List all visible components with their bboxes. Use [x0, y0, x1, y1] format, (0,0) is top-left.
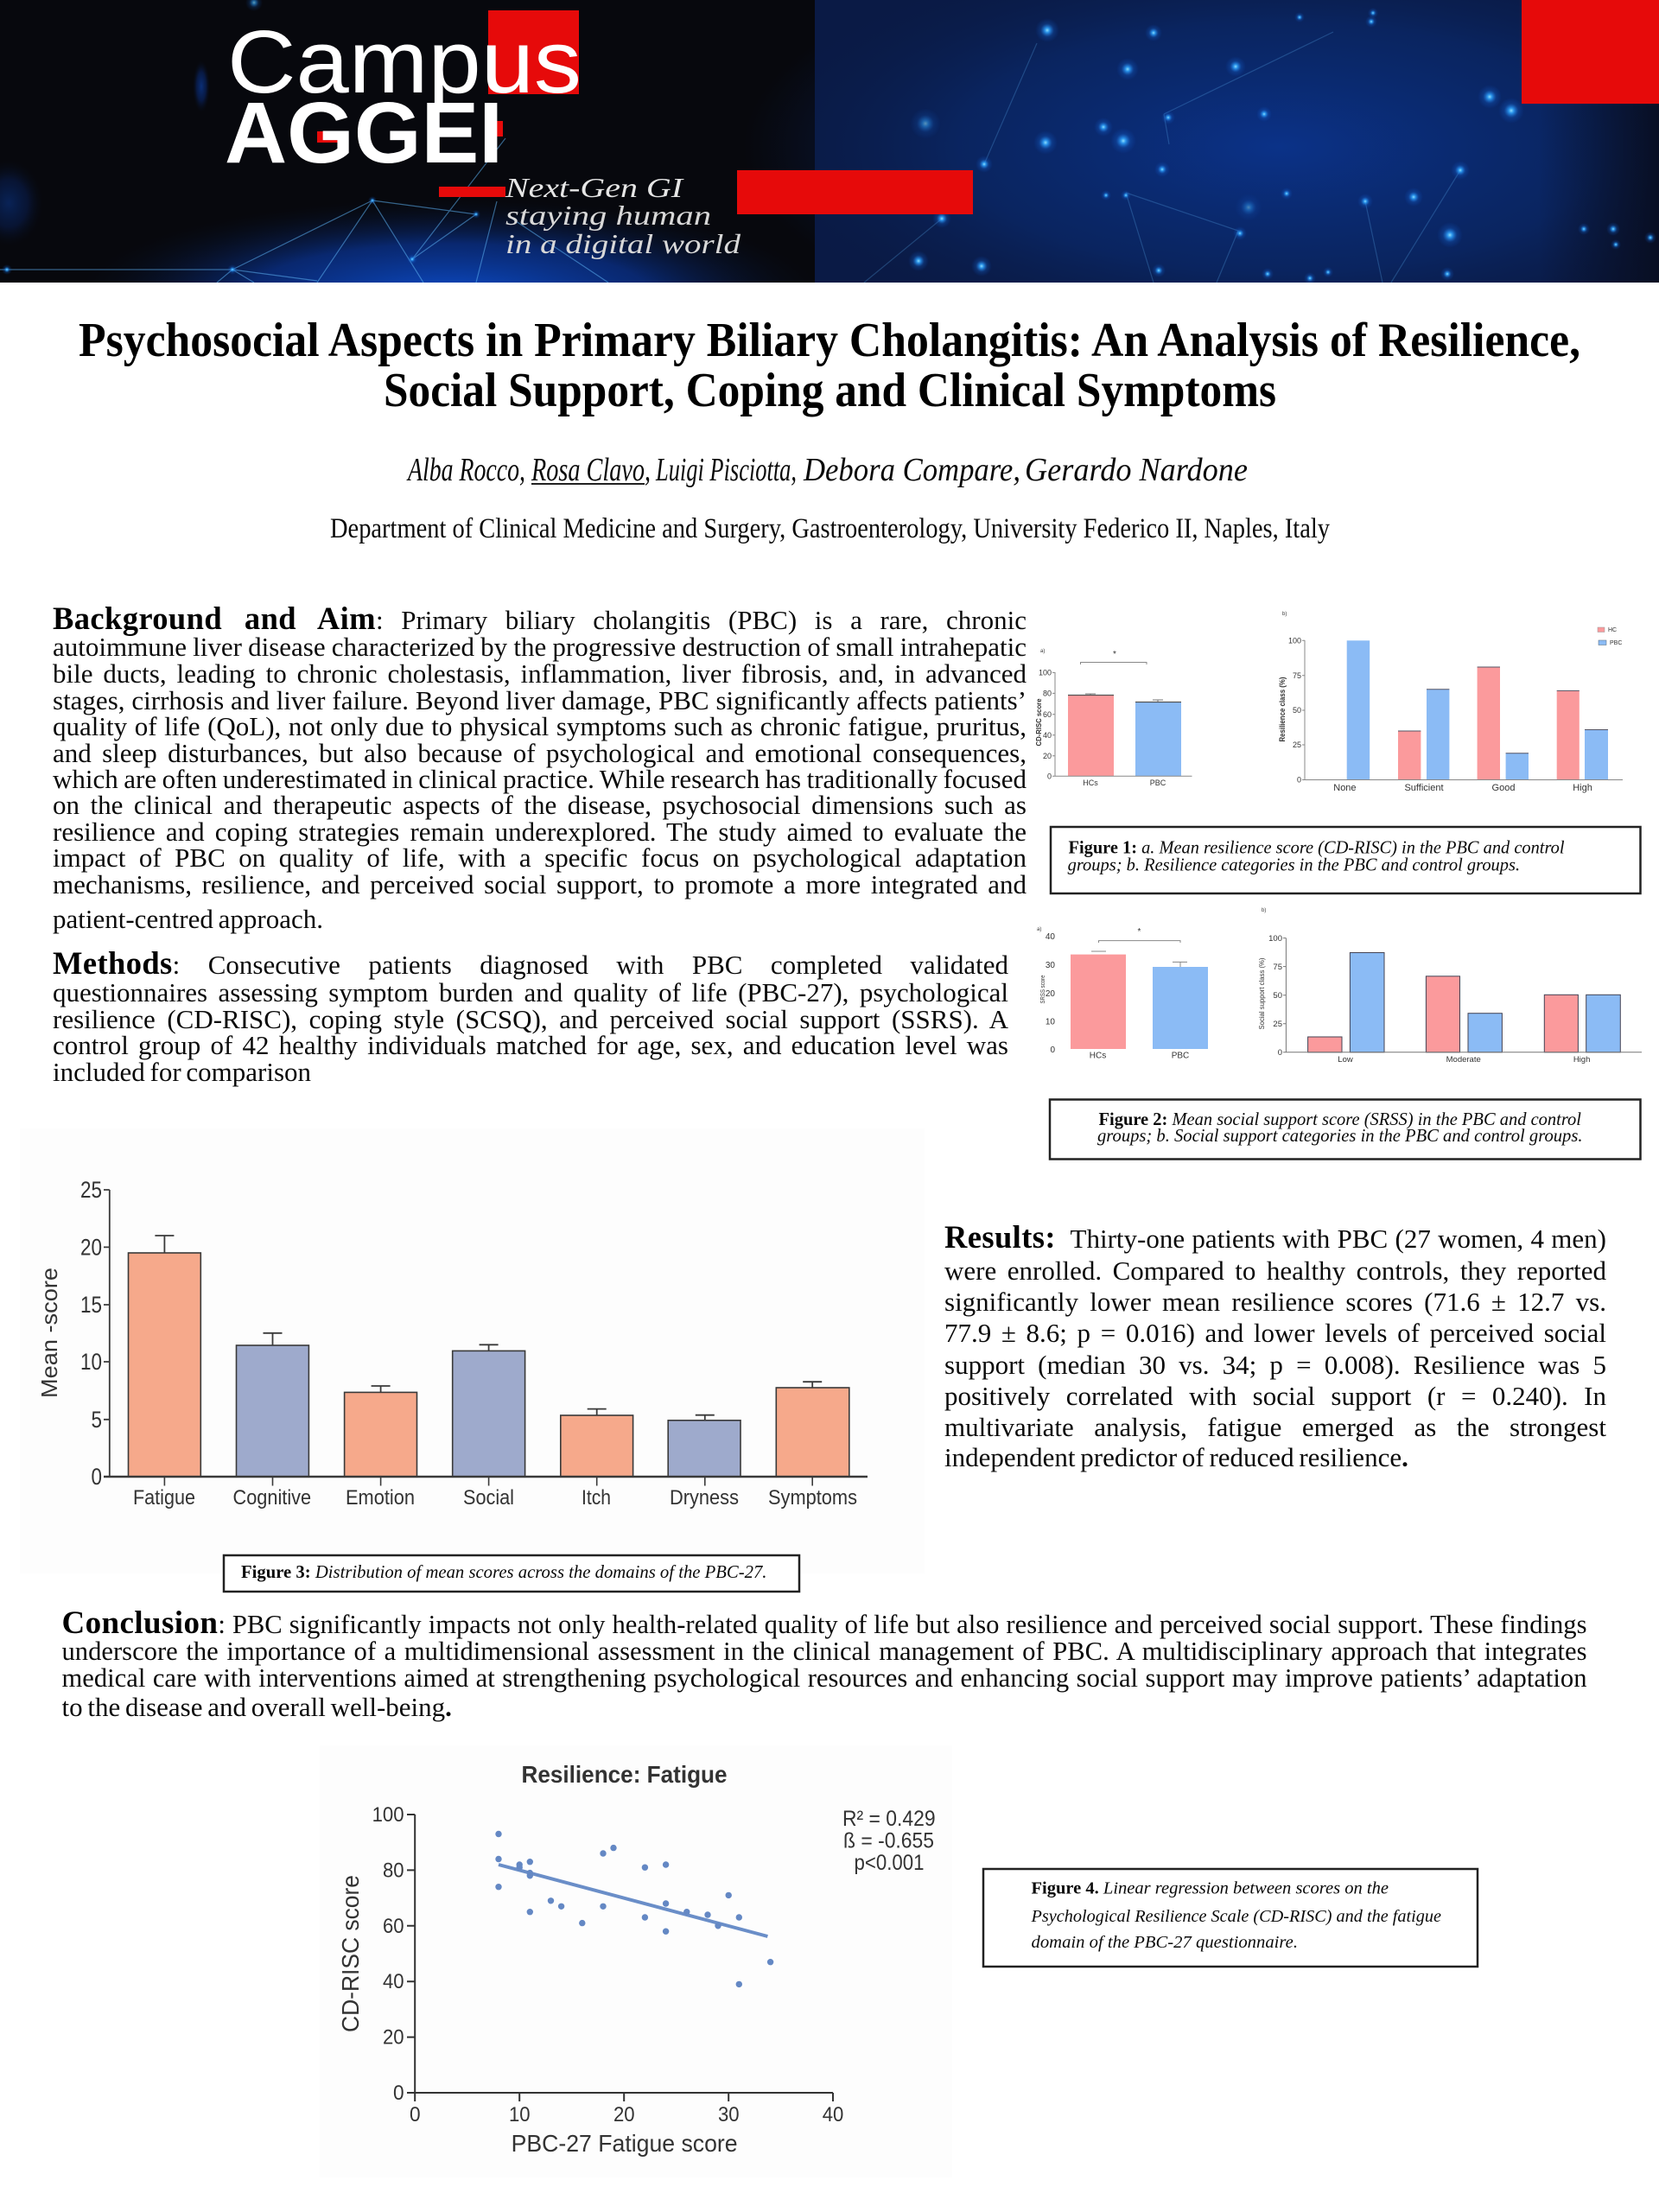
text block: background and aim: impact of PBC on quality of life, with a specific focus on psychological adaptation [53, 842, 1027, 873]
text block: background and aim: resilience and coping strategies remain underexplored. The study aimed to evaluate the [53, 817, 1027, 847]
caption: figure 1: Figure 1: a. Mean resilience score (CD-RISC) in the PBC and control [1068, 836, 1565, 857]
statistics annotation: R² = 0.429 [842, 1807, 936, 1831]
text block: results: were enrolled. Compared to healthy controls, they reported [944, 1255, 1606, 1286]
banner tagline [505, 172, 741, 259]
figure 1b: resilience categories bar chart: 25 [1293, 741, 1301, 749]
panel: figure 4 regression scatter plot: 40 [823, 2103, 843, 2126]
figure 1a: mean resilience bar chart: HCs [1083, 779, 1098, 787]
text block: background and aim: mechanisms, resilience, and perceived social support, to promote a more integrated and [53, 869, 1027, 899]
legend: HC [1608, 627, 1617, 633]
text block: background and aim: patient-centred approach. [53, 904, 323, 934]
figure 2b: social support categories bar chart: Moderate [1446, 1055, 1481, 1065]
caption: figure 4: domain of the PBC-27 questionnaire. [1032, 1933, 1298, 1952]
legend [1598, 627, 1622, 646]
authors: , [645, 452, 651, 488]
authors [406, 452, 1248, 488]
text block: conclusion: medical care with interventions aimed at strengthening psychological resources and enhancing social support may improve patients’ adaptation [62, 1663, 1586, 1693]
figure 2a: mean social support bar chart: HCs [1090, 1051, 1106, 1061]
figure 2b: social support categories bar chart: b) [1262, 908, 1266, 913]
panel: figure 4 regression scatter plot: 20 [383, 2026, 404, 2050]
panel: figure 3 PBC-27 domain bar chart: 20 [80, 1234, 102, 1260]
figure 2b: social support categories bar chart: Social support class (%) [1258, 957, 1266, 1030]
figure 1b: resilience categories bar chart: Sufficient [1404, 783, 1444, 793]
title [79, 314, 1580, 417]
title: Psychosocial Aspects in Primary Biliary Cholangitis: An Analysis of Resilience, [79, 314, 1580, 367]
caption: figure 2: Figure 2: Mean social support score (SRSS) in the PBC and control [1099, 1109, 1581, 1129]
panel: figure 3 PBC-27 domain bar chart: Cognitive [233, 1486, 311, 1510]
caption: figure 3 [224, 1555, 799, 1592]
text block: conclusion: Conclusion: PBC significantly impacts not only health-related quality of life but also resilience and perceived social support. These findings [62, 1605, 1586, 1641]
panel: figure 3 PBC-27 domain bar chart: 25 [80, 1177, 102, 1203]
caption: figure 4: Figure 4. Linear regression between scores on the [1032, 1878, 1389, 1897]
text block: conclusion: to the disease and overall well-being. [62, 1692, 452, 1722]
panel: figure 3 PBC-27 domain bar chart: 10 [80, 1349, 102, 1375]
text block: results: multivariate analysis, fatigue emerged as the strongest [944, 1412, 1606, 1442]
panel: figure 4 regression scatter plot: 60 [383, 1915, 404, 1938]
authors: Alba Rocco, [406, 452, 525, 488]
figure 1a: mean resilience bar chart: 40 [1043, 731, 1052, 740]
banner tagline: in a digital world [505, 228, 741, 259]
text block: methods: questionnaires assessing symptom burden and quality of life (PBC-27), psychological [53, 977, 1008, 1007]
panel: figure 4 regression scatter plot [320, 1745, 952, 2177]
figure 1b: resilience categories bar chart: None [1333, 783, 1357, 793]
authors: Gerardo Nardone [1025, 452, 1248, 488]
figure 2b: social support categories bar chart: 25 [1273, 1020, 1282, 1029]
figure 2a: mean social support bar chart: 10 [1046, 1018, 1055, 1027]
logo: Campus AGGEI [226, 30, 578, 163]
figure 1b: resilience categories bar chart: High [1573, 783, 1592, 793]
text block: background and aim: stages, cirrhosis and liver failure. Beyond liver damage, PBC significantly affects patients’ [53, 685, 1027, 715]
text block: methods: Methods: Consecutive patients diagnosed with PBC completed validated [53, 945, 1008, 981]
banner tagline: Next-Gen GI [505, 172, 684, 203]
panel: figure 3 PBC-27 domain bar chart: 15 [80, 1292, 102, 1318]
figure 1a: mean resilience bar chart: CD-RISC score [1035, 698, 1043, 747]
figure 1a: mean resilience bar chart: PBC [1150, 779, 1166, 787]
figure 1b: resilience categories bar chart: b) [1282, 612, 1287, 617]
panel: figure 4 regression scatter plot: 20 [613, 2103, 635, 2126]
text block: background and aim: and sleep disturbances, but also because of psychological and emotional consequences, [53, 738, 1027, 768]
figure 1a: mean resilience bar chart [1035, 649, 1192, 787]
legend: PBC [1610, 640, 1622, 646]
figure 1a: mean resilience bar chart: * [1113, 650, 1116, 659]
text block: background and aim: Background and Aim: Primary biliary cholangitis (PBC) is a rare, chronic [53, 601, 1027, 636]
text block: methods: included for comparison [53, 1057, 311, 1087]
text block: conclusion [62, 1605, 1586, 1722]
text block: background and aim: bile ducts, leading to chronic cholestasis, inflammation, liver fibrosis, and, in advanced [53, 658, 1027, 689]
caption: figure 4: Psychological Resilience Scale (CD-RISC) and the fatigue [1030, 1907, 1441, 1926]
panel: figure 3 PBC-27 domain bar chart: 0 [92, 1464, 102, 1490]
figure 2a: mean social support bar chart: 40 [1046, 932, 1055, 942]
figure 1b: resilience categories bar chart: Good [1492, 783, 1515, 793]
error bars [155, 1236, 822, 1421]
panel: figure 3 PBC-27 domain bar chart: Symptoms [768, 1486, 857, 1510]
figure 2b: social support categories bar chart: 75 [1273, 963, 1282, 972]
caption: figure 1: groups; b. Resilience categories in the PBC and control groups. [1068, 854, 1520, 874]
panel: figure 4 regression scatter plot: 10 [509, 2103, 531, 2126]
panel: figure 4 regression scatter plot: 80 [383, 1859, 404, 1882]
figure 1b: resilience categories bar chart [1278, 612, 1623, 793]
chart title: Resilience: Fatigue [522, 1761, 728, 1788]
text block: methods: resilience (CD-RISC), coping style (SCSQ), and perceived social support (SSRS). A [53, 1004, 1008, 1034]
text block: background and aim: autoimmune liver disease characterized by the progressive destruction of small intrahepatic [53, 632, 1027, 662]
figure 2a: mean social support bar chart [1037, 927, 1208, 1061]
text block: results: positively correlated with social support (r = 0.240). In [944, 1381, 1606, 1411]
bars [128, 1253, 849, 1477]
figure 2b: social support categories bar chart: Low [1338, 1055, 1353, 1065]
figure 2b: social support categories bar chart: 50 [1273, 991, 1282, 1001]
affiliation: Department of Clinical Medicine and Surgery, Gastroenterology, University Federico II, Naples, Italy [330, 513, 1330, 544]
figure 2b: social support categories bar chart: 100 [1268, 934, 1282, 944]
logo: Campus AGGEI: AGGEI [225, 85, 503, 181]
banner glowing dots [2, 0, 1656, 284]
figure 1b: resilience categories bar chart: 75 [1293, 671, 1301, 680]
panel: figure 4 regression scatter plot: 30 [718, 2103, 740, 2126]
text block: results: support (median 30 vs. 34; p = 0.008). Resilience was 5 [944, 1350, 1606, 1380]
caption: figure 3: Figure 3: Distribution of mean scores across the domains of the PBC-27. [241, 1561, 767, 1582]
figure 2a: mean social support bar chart: a) [1037, 927, 1041, 932]
text block: conclusion: underscore the importance of a multidimensional assessment in the clinical management of PBC. A multidisciplinary approach that integrates [62, 1637, 1586, 1666]
panel: figure 3 PBC-27 domain bar chart: Itch [582, 1486, 611, 1510]
title: Social Support, Coping and Clinical Symptoms [384, 364, 1276, 417]
figure 1a: mean resilience bar chart: 20 [1043, 752, 1052, 760]
panel: figure 4 regression scatter plot: CD-RISC score [337, 1875, 364, 2032]
text block: results: independent predictor of reduced resilience. [944, 1442, 1408, 1472]
figure 2b: social support categories bar chart: 0 [1278, 1048, 1282, 1058]
caption: figure 4 [983, 1869, 1478, 1967]
authors: Debora Compare, [803, 452, 1020, 488]
figure 2a: mean social support bar chart: SRSS score [1040, 975, 1046, 1004]
logo: Campus AGGEI: Campus [227, 12, 582, 111]
figure 1b: resilience categories bar chart: 0 [1297, 776, 1301, 785]
figure 1a: mean resilience bar chart: 60 [1043, 710, 1052, 719]
text block: results [944, 1219, 1606, 1472]
panel: figure 4 regression scatter plot: 100 [372, 1803, 404, 1827]
panel: figure 3 PBC-27 domain bar chart: Dryness [670, 1486, 739, 1510]
panel: figure 3 PBC-27 domain bar chart: Fatigue [133, 1486, 195, 1510]
authors: Luigi Pisciotta, [655, 452, 797, 488]
caption: figure 2: groups; b. Social support categories in the PBC and control groups. [1097, 1125, 1583, 1146]
regression line [499, 1865, 767, 1936]
panel: figure 3 PBC-27 domain bar chart [20, 1128, 925, 1573]
figure 1a: mean resilience bar chart: 80 [1043, 690, 1052, 698]
figure 2a: mean social support bar chart: 30 [1046, 961, 1055, 970]
figure 1b: resilience categories bar chart: Resilience class (%) [1278, 677, 1287, 741]
panel: figure 4 regression scatter plot: 40 [383, 1970, 404, 1993]
statistics annotation: ß = -0.655 [843, 1828, 934, 1853]
text block: background and aim: which are often underestimated in clinical practice. While research has traditionally focused [53, 764, 1027, 794]
text block: background and aim [53, 601, 1027, 934]
figure 1b: resilience categories bar chart: 100 [1288, 636, 1301, 645]
figure 1b: resilience categories bar chart: 50 [1293, 706, 1301, 715]
figure 1a: mean resilience bar chart: 0 [1047, 772, 1052, 781]
text block: results: Results: Thirty-one patients with PBC (27 women, 4 men) [944, 1219, 1606, 1255]
banner [0, 0, 1659, 283]
statistics annotation [842, 1807, 936, 1875]
figure 1a: mean resilience bar chart: 100 [1039, 669, 1052, 677]
banner tagline: staying human [505, 200, 711, 231]
caption: figure 2 [1050, 1099, 1640, 1160]
text block: methods [53, 945, 1008, 1087]
network lines [0, 32, 1460, 283]
figure 2a: mean social support bar chart: PBC [1172, 1051, 1189, 1061]
text block: results: significantly lower mean resilience scores (71.6 ± 12.7 vs. [944, 1287, 1606, 1317]
panel: figure 3 PBC-27 domain bar chart: Mean -score [36, 1268, 62, 1398]
figure 2a: mean social support bar chart: 0 [1050, 1046, 1055, 1055]
panel: figure 3 PBC-27 domain bar chart: Emotion [346, 1486, 415, 1510]
figure 2a: mean social support bar chart: * [1138, 927, 1141, 937]
text block: results: 77.9 ± 8.6; p = 0.016) and lower levels of perceived social [944, 1318, 1606, 1348]
text block: background and aim: on the clinical and therapeutic aspects of the disease, psychosocial dimensions such as [53, 790, 1027, 820]
figure 2b: social support categories bar chart: High [1573, 1055, 1590, 1065]
data points [495, 1831, 773, 1987]
text block: background and aim: quality of life (QoL), not only due to physical symptoms such as chronic fatigue, pruritus, [53, 711, 1027, 741]
panel: figure 3 PBC-27 domain bar chart: Social [463, 1486, 514, 1510]
caption: figure 1 [1051, 827, 1640, 893]
statistics annotation: p<0.001 [854, 1851, 925, 1875]
figure 2b: social support categories bar chart [1258, 908, 1642, 1065]
figure 2a: mean social support bar chart: 20 [1046, 989, 1055, 999]
authors: Rosa Clavo [531, 452, 645, 488]
panel: figure 4 regression scatter plot: 0 [393, 2082, 404, 2105]
panel: figure 4 regression scatter plot: PBC-27 Fatigue score [512, 2130, 738, 2157]
panel: figure 3 PBC-27 domain bar chart: 5 [92, 1407, 102, 1433]
text block: methods: control group of 42 healthy individuals matched for age, sex, and education level was [53, 1030, 1008, 1060]
logo red blocks [317, 0, 1659, 214]
figure 1a: mean resilience bar chart: a) [1040, 649, 1045, 654]
panel: figure 4 regression scatter plot: 0 [410, 2103, 421, 2126]
